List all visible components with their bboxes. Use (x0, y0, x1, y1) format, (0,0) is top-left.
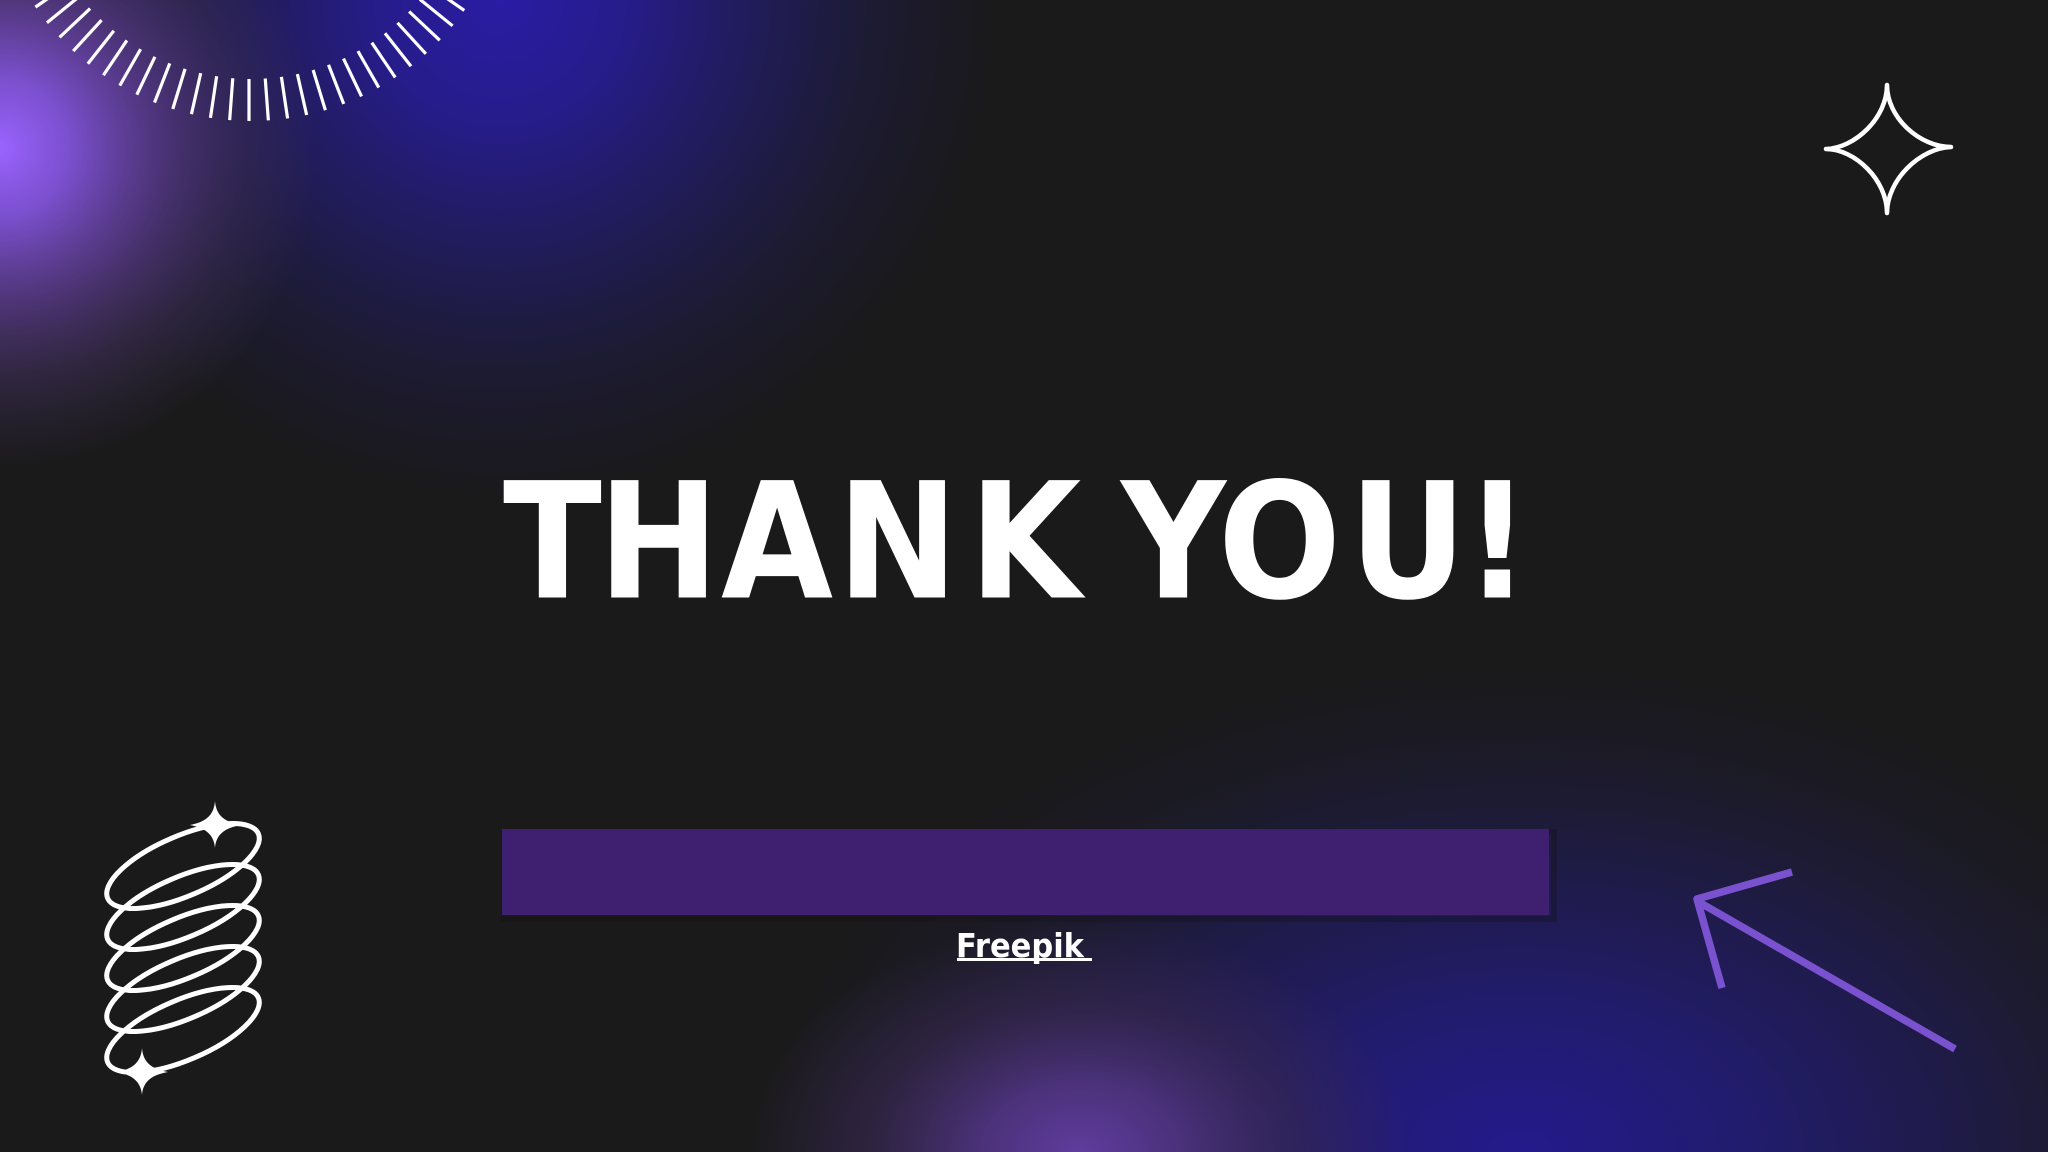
title: THANK YOU! (503, 449, 1530, 636)
icon: spiral with sparkles (96, 801, 270, 1095)
link: Freepik: Freepik (956, 926, 1085, 965)
glow: bottom purple (700, 900, 1460, 1152)
purple bar (502, 829, 1554, 919)
arrow (1697, 872, 1955, 1049)
icon: outlined four-point star (1826, 85, 1951, 213)
glow: top-left purple (0, 0, 400, 500)
icon: radial tick arc (25, 0, 475, 121)
glow: top blue (0, 0, 1100, 520)
glow: bottom blue (700, 640, 2048, 1152)
